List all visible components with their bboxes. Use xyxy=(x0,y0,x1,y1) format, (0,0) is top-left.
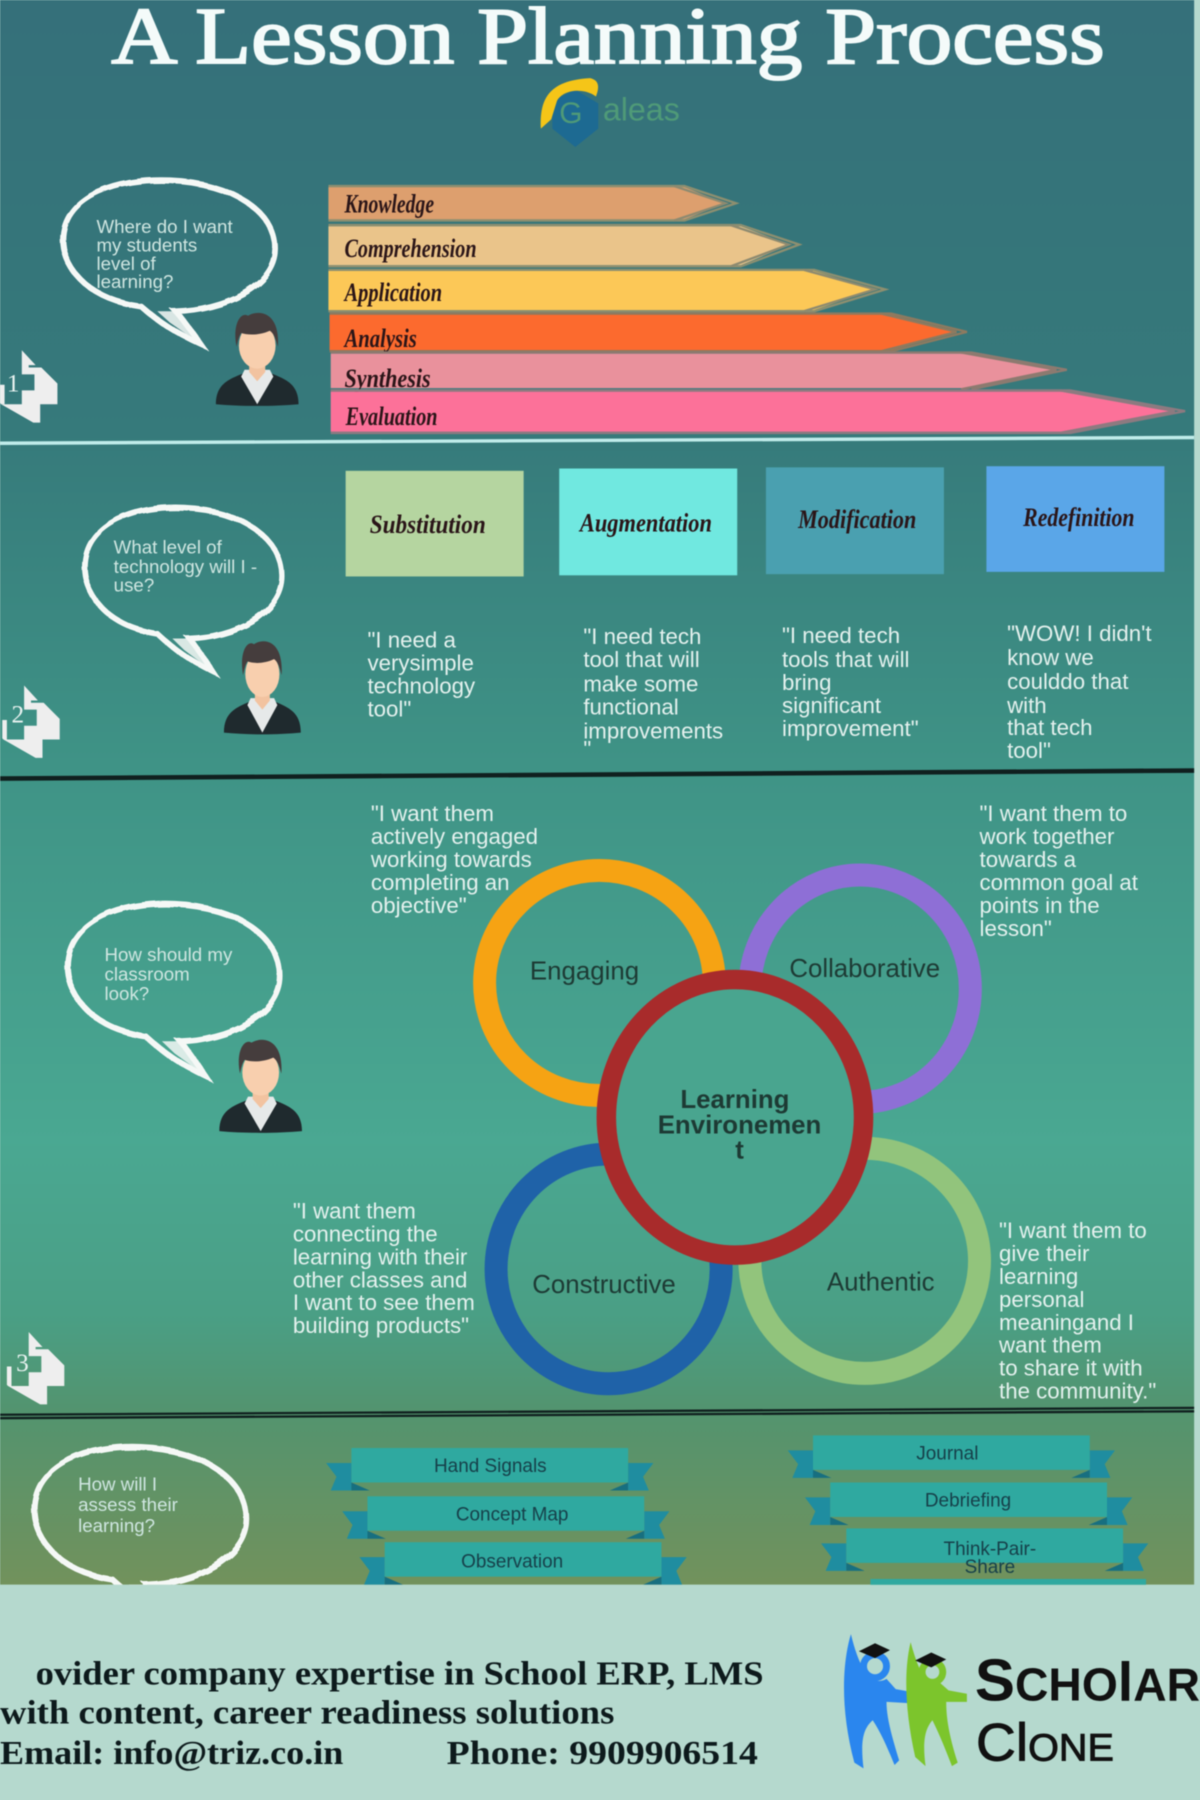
ribbon: Observation: Observation xyxy=(461,1551,563,1572)
ribbon: Journal: Journal xyxy=(916,1444,978,1465)
ribbon: Journal xyxy=(788,1435,1115,1478)
text: collaborative quote: lesson" xyxy=(980,916,1052,941)
ribbon: clipped bottom ribbon xyxy=(870,1579,1146,1586)
icon: step 1 xyxy=(0,350,57,423)
speech bubble 2: use? xyxy=(114,574,154,595)
text: constructive quote: building products" xyxy=(293,1313,469,1338)
text: constructive quote: connecting the xyxy=(293,1221,438,1246)
arrow: Analysis xyxy=(330,313,967,353)
text: redefinition quote: "WOW! I didn't xyxy=(1007,621,1152,646)
logo: Scholar Clone wordmark xyxy=(975,1647,1200,1772)
text: engaging quote: "I want them xyxy=(371,801,494,826)
box: Redefinition xyxy=(986,466,1164,572)
speech bubble 4: learning? xyxy=(78,1515,155,1536)
text: authentic quote: give their xyxy=(999,1241,1090,1266)
text: substitution quote: verysimple xyxy=(367,651,474,676)
speech bubble 4 xyxy=(30,1442,250,1586)
arrow: Comprehension xyxy=(328,225,799,266)
logo: Galeas xyxy=(541,78,680,147)
footer text xyxy=(0,1656,764,1772)
text: modification quote: significant xyxy=(782,693,882,718)
logo: Scholar Clone figures xyxy=(844,1634,967,1768)
text: redefinition quote: tool" xyxy=(1007,738,1051,763)
text: authentic quote: want them xyxy=(998,1333,1102,1358)
logo: Galeas: G xyxy=(559,97,582,130)
ring: Constructive xyxy=(496,1154,721,1384)
box: Substitution xyxy=(346,471,524,576)
arrow: Application xyxy=(328,270,885,311)
speech bubble 1: learning? xyxy=(96,271,173,292)
text: collaborative quote: common goal at xyxy=(980,870,1139,895)
text: authentic quote: to share it with xyxy=(999,1356,1143,1381)
text: collaborative quote: "I want them to xyxy=(980,801,1127,826)
text: redefinition quote: know we xyxy=(1007,645,1094,670)
text: authentic quote: "I want them to xyxy=(999,1218,1147,1243)
text: augmentation quote: tool that will xyxy=(583,647,700,672)
speech bubble 2 xyxy=(85,507,282,672)
box: Redefinition: Redefinition xyxy=(1022,502,1135,532)
icon: step 2 xyxy=(2,686,60,758)
text: constructive quote: other classes and xyxy=(293,1267,467,1292)
ring: Learning Environment centre: Environemen xyxy=(658,1111,821,1139)
ring: Authentic xyxy=(750,1148,980,1373)
speech bubble 4: How will I xyxy=(78,1474,157,1495)
speech bubble 3 xyxy=(68,904,280,1076)
text: engaging quote: completing an xyxy=(371,870,510,895)
icon: step 3: 3 xyxy=(16,1349,29,1377)
arrow: Synthesis xyxy=(331,353,1067,393)
speech bubble 1: my students xyxy=(96,234,197,255)
text: constructive quote: I want to see them xyxy=(293,1290,475,1315)
text: redefinition quote: with xyxy=(1006,693,1047,718)
box: Augmentation xyxy=(559,469,737,575)
text: modification quote: "I need tech xyxy=(782,623,900,648)
icon: step 3 xyxy=(7,1332,64,1404)
speech bubble 2: What level of xyxy=(114,536,223,557)
text: augmentation quote: "I need tech xyxy=(583,624,701,649)
ribbon: Debriefing: Debriefing xyxy=(925,1491,1011,1512)
text: collaborative quote: work together xyxy=(979,824,1115,849)
speech bubble 2: technology will I - xyxy=(114,556,257,577)
text: augmentation quote: make some xyxy=(583,671,698,696)
speech bubble 1: level of xyxy=(96,253,157,274)
ring: Learning Environment centre: Learning xyxy=(680,1086,789,1114)
text: modification quote: improvement" xyxy=(782,716,919,741)
ribbon: Hand Signals xyxy=(326,1448,653,1491)
text: augmentation quote: functional xyxy=(583,694,679,719)
text: authentic quote: the community." xyxy=(999,1379,1156,1404)
ring: Engaging xyxy=(485,870,714,1096)
text: engaging quote: working towards xyxy=(370,847,532,872)
ribbon: Observation xyxy=(359,1542,687,1585)
icon: step 2: 2 xyxy=(11,700,24,728)
speech bubble 1 xyxy=(63,180,276,344)
section 4: assessment xyxy=(30,1435,1148,1586)
arrow: Analysis: Analysis xyxy=(343,323,417,353)
icon: teacher 1 xyxy=(216,313,299,406)
box: Modification: Modification xyxy=(797,504,916,534)
speech bubble 1: Where do I want xyxy=(96,216,233,237)
footer text: Email: info@triz.co.in xyxy=(0,1735,344,1772)
ribbon: Debriefing xyxy=(805,1482,1132,1525)
text: constructive quote: "I want them xyxy=(293,1198,416,1223)
text: redefinition quote: that tech xyxy=(1007,715,1093,740)
speech bubble 3: look? xyxy=(104,983,149,1004)
ring: Collaborative: Collaborative xyxy=(789,955,940,983)
icon: step 1: 1 xyxy=(7,370,20,398)
text: engaging quote: actively engaged xyxy=(371,824,538,849)
ring: Engaging: Engaging xyxy=(530,958,639,986)
ring: Collaborative xyxy=(750,875,970,1102)
box: Augmentation: Augmentation xyxy=(578,508,712,538)
ribbon: Hand Signals: Hand Signals xyxy=(434,1456,547,1477)
logo: Scholar Clone wordmark: SCHOlAR xyxy=(975,1647,1200,1714)
text: collaborative quote: towards a xyxy=(980,847,1077,872)
arrow: Application: Application xyxy=(343,277,442,307)
text: authentic quote: learning xyxy=(999,1264,1078,1289)
section 2: technology levels xyxy=(2,466,1164,763)
box: Substitution: Substitution xyxy=(370,509,486,539)
arrow: Knowledge: Knowledge xyxy=(344,188,434,218)
icon: teacher 2 xyxy=(224,641,301,734)
text: augmentation quote: improvements xyxy=(583,718,723,743)
arrow: Evaluation: Evaluation xyxy=(345,401,438,431)
ring: Constructive: Constructive xyxy=(532,1271,676,1299)
text: authentic quote: meaningand I xyxy=(999,1310,1134,1335)
footer text: ovider company expertise in School ERP, LMS xyxy=(36,1656,764,1693)
footer text: with content, career readiness solutions xyxy=(0,1695,614,1732)
section 1: learning levels xyxy=(0,180,1185,433)
box: Modification xyxy=(766,467,944,574)
ring: Learning Environment centre: t xyxy=(735,1137,744,1165)
arrow: Synthesis: Synthesis xyxy=(344,363,431,393)
arrow: Knowledge xyxy=(328,186,736,220)
text: substitution quote: technology xyxy=(367,674,476,699)
speech bubble 3: classroom xyxy=(104,964,190,985)
text: constructive quote: learning with their xyxy=(293,1244,468,1269)
ring: Authentic: Authentic xyxy=(827,1269,935,1297)
speech bubble 4: assess their xyxy=(78,1494,178,1515)
arrow: Evaluation xyxy=(331,390,1185,433)
ribbon: Think-Pair-Share: Share xyxy=(965,1557,1015,1578)
text: modification quote: bring xyxy=(782,670,832,695)
section 3: learning environment xyxy=(7,801,1156,1404)
ribbon: Think-Pair-Share: Think-Pair- xyxy=(944,1539,1036,1560)
text: modification quote: tools that will xyxy=(782,647,909,672)
text: engaging quote: objective" xyxy=(371,893,467,918)
text: authentic quote: personal xyxy=(999,1287,1084,1312)
arrow: Comprehension: Comprehension xyxy=(344,233,477,263)
footer xyxy=(0,1634,1200,1772)
ring: Learning Environment centre xyxy=(606,980,864,1255)
text: collaborative quote: points in the xyxy=(980,893,1100,918)
ribbon: Concept Map: Concept Map xyxy=(456,1504,568,1525)
footer text: Phone: 9909906514 xyxy=(447,1735,758,1772)
ribbon: Concept Map xyxy=(342,1496,669,1539)
ribbon: Think-Pair-Share xyxy=(821,1528,1148,1578)
text: substitution quote: tool" xyxy=(367,697,411,722)
logo: Galeas: aleas xyxy=(603,92,680,128)
text: augmentation quote: " xyxy=(583,737,591,762)
speech bubble 3: How should my xyxy=(104,944,233,965)
logo: Scholar Clone wordmark: ClONE xyxy=(976,1713,1114,1772)
text: redefinition quote: coulddo that xyxy=(1007,669,1129,694)
text: substitution quote: "I need a xyxy=(367,628,456,653)
icon: teacher 3 xyxy=(219,1040,302,1133)
